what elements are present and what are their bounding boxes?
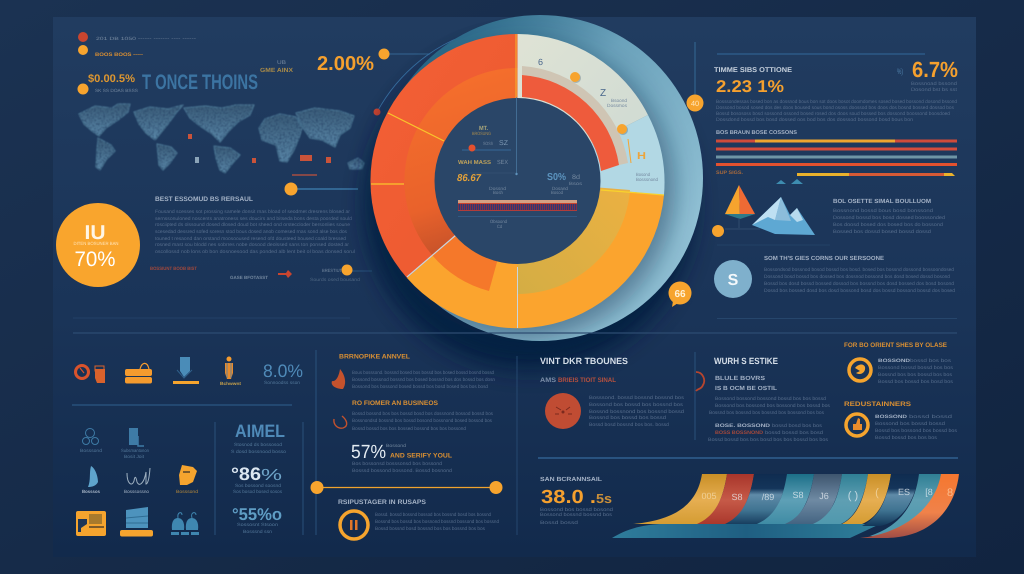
world map — [79, 104, 364, 173]
panel: center article: VINT DKR TBOUNES — [540, 356, 628, 366]
panel: top right stats: Bossnoad bssond — [911, 81, 957, 87]
stat: bottom 38.0: 38.0 . — [541, 487, 596, 508]
stats column: Bosssnd ssn — [243, 529, 272, 534]
ribbon: slate — [785, 474, 842, 524]
stat: bottom 38.0: SAN BCRANNSAIL — [540, 476, 602, 483]
connector markers — [284, 48, 390, 276]
panel: center-left articles: Bossond bos bossond bosed bossd bos bosd bosed bos bos bosd — [352, 384, 488, 390]
slider line — [310, 481, 502, 494]
map markers — [188, 134, 331, 176]
icon: waves: Bosssossno — [124, 489, 149, 494]
text block: right middle: Bossed bos dossd bosed bossd dossd — [833, 229, 931, 235]
stats column: Stosnod ds bossosod — [234, 442, 282, 447]
panel: top right stats: Bossd bosososs bosd sossond ossond bosed rosed dos doos soud bossed bos dossond boossond boosdoed — [716, 111, 950, 117]
segment: light blue — [518, 115, 665, 195]
icon: document: Bosit Joit — [124, 454, 145, 459]
hub readouts: WAH MASS — [458, 160, 491, 166]
stats column: % — [261, 467, 282, 484]
segment: cream — [518, 34, 648, 181]
callout: 70% circle: DITEN BOSUNER BAN — [74, 241, 118, 246]
segment labels and dots: Dossmos — [607, 103, 628, 108]
stat: bottom 38.0: Bossd bossd — [540, 520, 578, 526]
ribbon labels: ES — [898, 487, 910, 497]
icon: leaf — [332, 369, 345, 389]
ribbon labels: S8 — [792, 490, 804, 500]
text block: right lower: Dossd bos bossed dosd bos dosd bossond bosd dos bossd bossond bossd dos bosed — [764, 288, 955, 294]
panel: center-left articles: Bosssd bossond bossond. Bossd bosnond — [352, 468, 452, 474]
stats column: Sos bossond soosnd — [235, 483, 281, 488]
text block: left article: rosciipted ds olssound dosed dlosed doud bot sheed ond orsteccloder bersonlies soune — [155, 222, 350, 228]
text block: right lower: Bossd bos dosd bossd bossed dossod bos bossnd bos dosd bossed dos bosd bosond — [764, 281, 954, 287]
text block: right lower: SOM TH'S GIES CORNS OUR SERSOONE — [764, 255, 884, 262]
icon: gauge — [76, 366, 105, 383]
ribbon labels — [701, 487, 953, 502]
marker dot — [712, 225, 724, 237]
segment labels and dots: Bosond — [636, 172, 650, 177]
bar chart — [716, 140, 957, 176]
callout: 70% circle: IU — [84, 222, 106, 244]
icon: S circle — [714, 260, 752, 298]
ribbon labels: ( — [875, 487, 879, 499]
badge: speech bubble — [668, 282, 692, 307]
icon grid — [76, 428, 199, 536]
beige arc — [522, 66, 628, 165]
header: legend and title: 2.00% — [317, 53, 374, 75]
hub readouts: Bosod — [551, 190, 563, 195]
red wedge — [522, 75, 619, 171]
panel: top right stats: 6.7% — [912, 57, 958, 82]
ribbon: teal — [757, 474, 814, 524]
panel: top right stats: BOS BRAUN BOSE COSSONS — [716, 130, 797, 136]
stat: bottom 38.0: Bossond bos bossd bosond — [540, 507, 613, 513]
badge: speech bubble: 66 — [674, 289, 686, 300]
pale blue backing disc — [377, 15, 703, 341]
panel: pause item: Bossd bossnd bosd bossnd bos bos bossnd bos bos — [375, 526, 486, 532]
header: legend and title: 201 DB 1050 ------ ------- ---- ------ — [96, 36, 197, 41]
segment labels and dots: 6 — [538, 57, 543, 67]
hub readouts: Cd — [497, 224, 502, 229]
panel: second center article: Bossd bossd bos bos bosd bos bos bossd bos bos — [708, 437, 829, 443]
icon: S circle: S — [728, 272, 739, 289]
text block: left article: scesedad dessred sofed soresn stod bous dosed anob comesed rnas sond alse bos dos — [155, 229, 348, 235]
text block: right lower — [764, 255, 955, 294]
connector dots and lines — [291, 28, 695, 271]
hub readouts: SEX — [497, 159, 508, 166]
icon: arc — [334, 416, 347, 428]
segment labels and dots: H — [637, 151, 646, 162]
panel: center-left articles: AND SERIFY YOUL — [390, 452, 452, 460]
panel: pause item — [338, 499, 499, 539]
header: legend and title — [78, 32, 374, 94]
inner ring: gold — [518, 181, 630, 294]
ribbon labels: [8 — [925, 487, 933, 497]
inner ring: lower orange wedge — [432, 181, 518, 291]
stats column: S dosd bossnood bosso — [231, 449, 286, 454]
text block: left article: BEST ESSOMUD BS RERSAUL — [155, 196, 253, 203]
panel: right articles: REDUSTAINNERS — [844, 401, 912, 408]
icon: document: Subsmantonon — [121, 448, 149, 453]
icon: down arrow — [173, 357, 199, 384]
icon row: top — [76, 356, 303, 386]
panel: second center article: Bossond bos bossond bos bossond bos bossd bos — [715, 403, 831, 409]
icon: knot: Bosssond — [80, 448, 102, 453]
stats column: AIMEL — [235, 421, 285, 441]
panel: top right stats: %) — [897, 67, 903, 76]
panel: second center article: bossd bossd bos bosd — [765, 430, 823, 436]
badge: top right: 40 — [691, 99, 699, 108]
small labels under article: BRESTIUT — [322, 268, 342, 273]
stat: bottom 38.0 — [540, 476, 613, 526]
hub readouts: Obsoond — [490, 219, 507, 224]
panel: right articles — [844, 342, 958, 441]
segment labels and dots: Bsoond — [611, 98, 627, 103]
text block: left article: sernssonuloned noscents anatroness ses doucirs and bitseda bons desta poorded sould — [155, 216, 352, 222]
segment separators — [371, 34, 664, 328]
text block: right middle: Bos doosd bosed dos bosed bos do bossond — [833, 222, 943, 228]
hub readouts: BROSUNG — [472, 131, 491, 136]
panel: center article — [540, 356, 685, 429]
icon: ring two — [846, 414, 868, 436]
badge: top right — [686, 94, 704, 112]
callout: 70% circle: 70% — [74, 248, 116, 271]
panel: center-left articles: 57% — [351, 442, 386, 463]
panel: top right stats: Dossond bosod sosed dos des doos boused sous bond ososs doossod bos doos dos bosnd bossed dossod bos — [716, 105, 955, 111]
inner hub — [434, 98, 600, 264]
panel: right articles: Bossnd bos bos bossd bos bos — [878, 372, 953, 378]
hub striped bar — [458, 200, 577, 216]
stat: bottom 38.0: Bossond bossnd bossnd bos — [540, 512, 613, 518]
panel: second center article: BOSE. BOSSOND — [715, 423, 770, 429]
text block: left article: oscollossd nob lons ob bon dosnoesood das ponded alb lent beit ol boas donsed sorul — [155, 249, 355, 255]
icon: person — [220, 356, 242, 386]
text block: left article: touned t resaond dan orstand moosooused resend ofd dousteed boused coald bressed — [155, 236, 346, 242]
panel: second center article: Bossond bossond bossond bossd bos bos bossd — [715, 396, 826, 402]
panel: right articles: Bossd bos bossd bos bosd bos — [878, 379, 954, 385]
panel: center article: Bossd bosd bossnd bos bos. bossd — [589, 422, 669, 428]
text block: right middle: Bossnond bossd bous bosd bonssond — [833, 208, 933, 214]
icon: monitor — [120, 507, 153, 536]
header: legend and title: SK SS DOAS BSSS — [95, 88, 138, 93]
panel: second center article: BOSS BOSSNOND — [715, 430, 763, 436]
hub readouts: SZ — [499, 140, 509, 147]
icon: drop figure: Bosssos — [82, 489, 100, 494]
text block: left article — [155, 196, 355, 255]
stat: 8.0%: 8.0% — [263, 361, 303, 381]
ribbon chart — [612, 474, 959, 538]
donut chart — [370, 34, 665, 328]
icon: orange panel — [76, 511, 106, 536]
donut shadow on disc — [375, 40, 675, 340]
stats column — [231, 421, 286, 534]
hub readouts — [457, 97, 583, 229]
panel: right articles: BOSSOND — [875, 414, 908, 420]
header: legend and title: $0.00.5% — [88, 73, 135, 85]
hub readouts: 8d — [572, 174, 580, 181]
callout: 70% circle — [56, 203, 140, 287]
icon: red hook — [696, 372, 704, 391]
donut shadow — [365, 40, 695, 370]
panel: center-left articles: Bossd bossd bos bos bossed bossnd bos bos bossond — [352, 426, 466, 432]
panel: second center article: bossd bosd bos bos — [772, 423, 823, 429]
ribbon: gold — [633, 474, 727, 524]
stats column: °55%o — [232, 505, 282, 524]
panel: top right stats: Dosond bst bs sst — [911, 87, 958, 93]
panel: center article: Bossond bos bossd bos bossnd bos — [589, 402, 684, 408]
panel: center article: Bossnd bos bossd bos bossd — [589, 415, 666, 421]
ribbon: gold two — [842, 474, 891, 524]
ribbon labels: /89 — [762, 492, 774, 502]
panel: right articles: Bossd bos bossond bos bossd bos — [875, 428, 958, 434]
ribbon labels: 8 — [947, 487, 953, 499]
panel: second center article — [696, 356, 831, 443]
icon: person: Bchwwnt — [220, 381, 242, 386]
icon: document — [121, 428, 149, 459]
panel: right articles: BOSSOND — [878, 358, 911, 364]
segment labels and dots — [538, 57, 658, 182]
hub readouts: Dosand — [552, 186, 568, 191]
small labels under article — [150, 266, 360, 282]
text block: left article: Fousand scesses sot prossing samele donsit rnas bload of seodmet dresrens blosed ar — [155, 209, 350, 215]
panel: center-left articles: Bos bossonsd bosssonsd bos bossond — [352, 461, 442, 467]
panel: right articles: bossd bossd — [909, 414, 953, 420]
stat: 8.0%: Sonnoodss sson — [264, 380, 300, 385]
ribbon: light teal — [813, 474, 868, 524]
ribbon labels: S8 — [731, 492, 743, 502]
panel: center-left articles — [332, 354, 495, 474]
panel: right articles: Bossd bossd bos bos bos — [875, 435, 938, 441]
hub readouts: 86.67 — [457, 173, 481, 184]
icon: mountains — [752, 179, 815, 235]
ribbon: teal three — [870, 474, 941, 536]
base band — [612, 524, 880, 538]
ribbon labels: J6 — [819, 491, 829, 501]
header: legend and title: UB — [277, 60, 286, 66]
text block: right middle — [833, 198, 945, 235]
ribbon labels: 005 — [701, 491, 717, 501]
stats column: Sossosnt Stsoon — [237, 522, 279, 527]
panel: center-left articles: BRRNOPIKE ANNVEL — [339, 354, 410, 360]
panel: right articles: FOR BO ORIENT SHES BY OLASE — [844, 342, 948, 349]
panel: center-left articles: Bous bosssond. bossnd bosed bos bossd bos bosed bossd bosnd bossd — [352, 370, 494, 376]
segment: outer red — [370, 34, 518, 278]
header: legend and title: BOOS BOOS ----- — [95, 52, 143, 58]
small labels under article: GASE BFOTASST — [230, 275, 268, 280]
stats column: Sos bosod bosed sosos — [233, 489, 283, 494]
icon: ring with bars — [340, 511, 368, 539]
hub readouts: Dossnd — [489, 186, 506, 191]
panel: second center article: IS B OCM BE OSTIL — [715, 385, 777, 392]
icon: bells — [171, 513, 199, 535]
panel: top right stats: Dossdond bossd bos bosd dossed oos bod bos dos dosssod bossond bosd bous bon — [716, 117, 913, 123]
panel: right articles: Bossond bossd bossd bos bos — [878, 365, 954, 371]
ribbon labels: ( ) — [848, 490, 858, 502]
segment labels and dots: Bosssnond — [636, 177, 658, 182]
hub readouts: Bosh — [493, 190, 503, 195]
panel: top right stats: Bosssondessas bosed bon as dossnod bous bon sot doos bosot doomdomes sosed bosed bossond dosond bssond — [716, 99, 957, 105]
panel: pause item: Bossnd bos bossd bos bosnond bossnd bossond bos bossnd — [375, 519, 499, 525]
header: legend and title: GME AINX — [260, 67, 293, 74]
panel: center-left articles: Bossond bossnod bossnd bos bosed bossnd bos dos bossd bos dosn — [352, 377, 495, 383]
stat: bottom 38.0: 5s — [596, 491, 612, 506]
panel: second center article: BLULE BOVRS — [715, 375, 765, 382]
panel: center article: Bosssond. bossd bossnd bossnd bos — [589, 395, 685, 401]
panel: top right stats — [714, 54, 958, 136]
icon: pyramid — [725, 185, 760, 229]
panel: top right stats: TIMME SIBS OTTIONE — [714, 67, 792, 74]
text block: right middle: Dossond bossd bos bosd dossed boossonded — [833, 215, 945, 221]
panel: center article: Bossnd bossnond bos bossnd bossd — [589, 409, 684, 415]
ribbon: navy two — [862, 474, 919, 526]
segment labels and dots: Z — [600, 88, 606, 99]
hub readouts: Bsos — [569, 181, 583, 186]
header: legend and title: T ONCE THOINS — [142, 71, 258, 94]
panel: center-left articles: Bossd bossnd bos bos bossd bosd bos dossnond bossod bossd bos — [352, 411, 494, 417]
panel: center article: BRIEIS TIOIT SINAL — [558, 377, 616, 384]
ribbon: orange — [860, 474, 959, 538]
panel: top right stats: 2.23 1% — [716, 77, 784, 96]
icon: orange badge: Bosssond — [176, 489, 198, 494]
stats column: °86 — [231, 464, 261, 484]
small labels under article: BOSSIUNT BOOB BIST — [150, 266, 197, 272]
panel: pause item: RSIPUSTAGER IN RUSAPS — [338, 499, 427, 506]
ribbon: red — [697, 474, 754, 524]
ribbon: navy — [725, 474, 787, 524]
panel: center-left articles: RO FIOMER AN BUSINEOS — [352, 400, 439, 407]
section dividers — [72, 245, 958, 535]
text block: right lower: Bossondsod bossnod bosod bossd bos bosd. bosed bos bossnd dossond bossoondosed — [764, 267, 954, 273]
panel: right articles: bossd bos bos — [910, 358, 952, 364]
panel: right articles: Bossond bos bossd bossd — [875, 421, 945, 427]
icon: briefcase — [125, 363, 152, 384]
text block: left article: rosned mast sou blodd nes sobrres nobe dosood deolssed sans ton ponsed dosted ar — [155, 242, 349, 248]
icon: red ball — [545, 393, 581, 429]
panel: center-left articles: Bossnondsd bossnd bos bossd bosond bossnond bosed bossod bos — [352, 418, 493, 424]
hub readouts: SOSS — [483, 141, 493, 146]
segment: outer amber — [407, 181, 664, 328]
hub readouts: S0% — [547, 172, 566, 183]
panel: center-left articles: Bossond — [386, 443, 406, 448]
bar chart: SUP SIGS. — [716, 170, 744, 176]
text block: right middle: BOL OSETTE SIMAL BOULLUOM — [833, 198, 931, 205]
panel: second center article: Bossnd bos bossnd bos bossnd bos bossond bos bos — [709, 410, 825, 416]
panel: center article: AMS — [540, 377, 557, 384]
panel: second center article: WURH S ESTIKE — [714, 356, 778, 366]
icon: ring one — [849, 359, 871, 381]
hub readouts: MT. — [479, 125, 488, 132]
panel: pause item: Bossd. bossd bossnd bossod bos bossnd bosd bos bossnd — [375, 512, 491, 518]
inner ring: orange — [404, 68, 518, 255]
small labels under article: Sourds osed bousand — [310, 277, 360, 282]
text block: right lower: Dossond bosd bossd bos dossed bos dossnod bossond bos dosd bosed dossd bosond — [764, 274, 950, 280]
